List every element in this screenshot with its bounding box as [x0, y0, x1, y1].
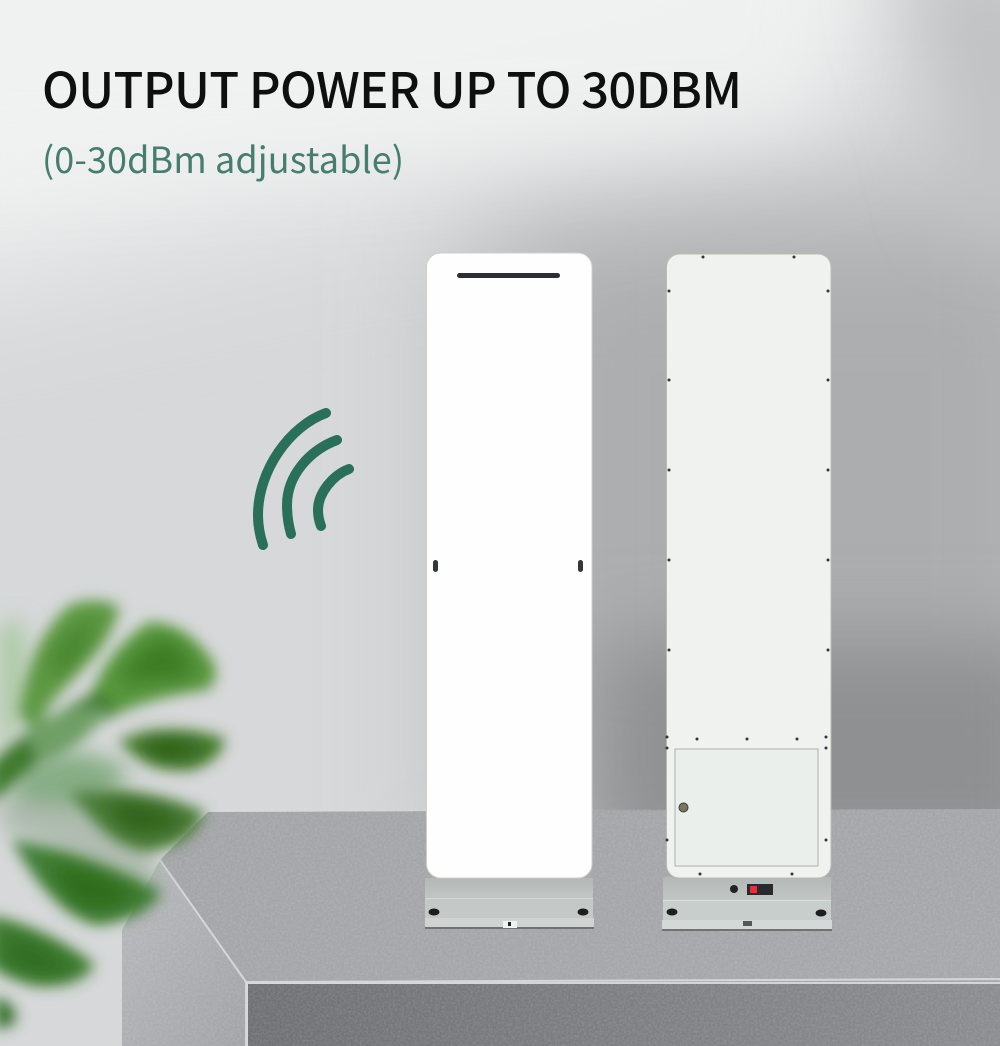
- rear panel base: [662, 877, 832, 931]
- subtitle: (0-30dBm adjustable): [42, 132, 404, 184]
- front panel base: [425, 878, 594, 929]
- door lock: [679, 803, 688, 812]
- left side sensor: [433, 560, 438, 572]
- product: rear panel: [662, 254, 832, 931]
- leaves: [0, 601, 225, 1028]
- leaf haze: [0, 620, 158, 900]
- icon: wireless signal arcs: [258, 413, 349, 545]
- service door: [675, 749, 818, 866]
- title: OUTPUT POWER UP TO 30DBM: [42, 52, 742, 123]
- product: front panel: [425, 253, 594, 929]
- leaf dark centres: [5, 618, 212, 975]
- mounting screws: [666, 256, 830, 876]
- plant: blurred leaves: [0, 601, 225, 1028]
- right side sensor: [578, 560, 583, 572]
- front panel body: [426, 253, 592, 878]
- table: [122, 809, 1000, 1046]
- rear panel body: [666, 254, 831, 878]
- indicator slot: [457, 273, 560, 278]
